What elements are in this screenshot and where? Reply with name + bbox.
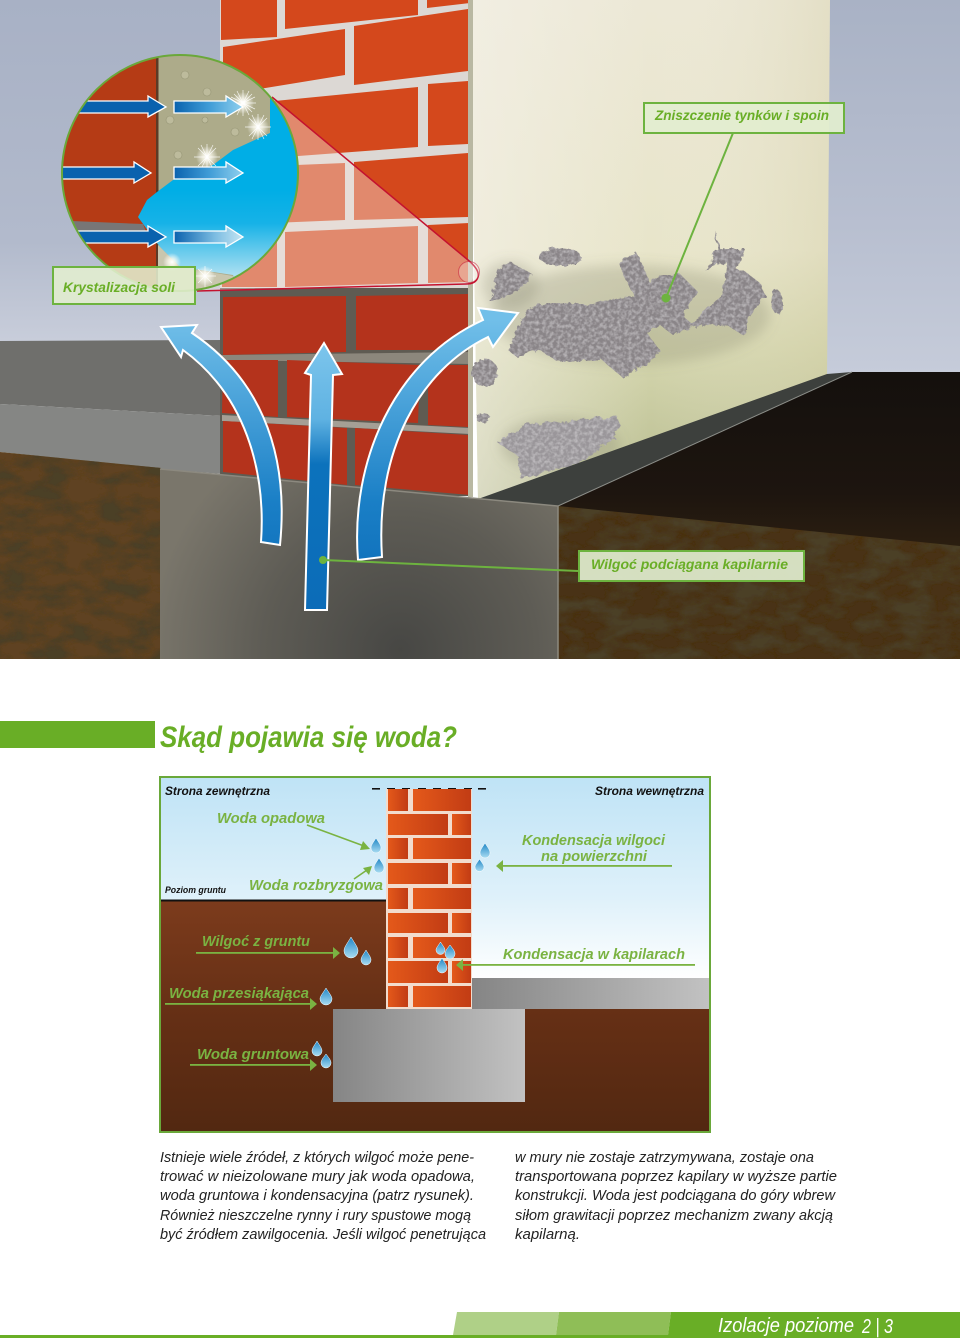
water source labels: Woda gruntowa — [197, 1046, 309, 1063]
callout: plaster damage: Zniszczenie tynków i spoin — [654, 107, 829, 123]
text block right: w mury nie zostaje zatrzymywana, zostaje ona — [515, 1150, 814, 1166]
text block right: transportowana poprzez kapilary w wyższe partie — [515, 1169, 837, 1185]
sky background — [161, 778, 709, 980]
top dashes — [372, 788, 486, 790]
floor slab — [472, 978, 709, 1009]
blue arrow left — [161, 325, 282, 545]
salt damage patches — [472, 230, 782, 479]
text block left — [160, 1150, 486, 1243]
water source labels: Wilgoć z gruntu — [202, 933, 310, 950]
water source labels — [169, 810, 685, 1063]
footer title: Izolacje poziome — [718, 1315, 854, 1337]
dark blue arrows — [55, 96, 166, 247]
text block right: konstrukcji. Woda jest podciągana do góry wbrew — [515, 1188, 837, 1204]
green arrows — [165, 825, 695, 1071]
fading blue arrows — [174, 96, 243, 247]
damp halo — [482, 261, 770, 473]
water source labels: Woda rozbryzgowa — [249, 877, 383, 894]
salt crystals — [163, 90, 271, 288]
leader line: capillary moisture — [319, 556, 578, 571]
callout: salt crystallisation — [53, 267, 195, 304]
footer band — [0, 1312, 960, 1338]
text block left: woda gruntowa i kondensacyjna (patrz rysunek). — [160, 1188, 474, 1204]
water source labels: Woda przesiąkająca — [169, 985, 309, 1002]
heading: Skąd pojawia się woda? — [160, 721, 457, 754]
brick wall — [386, 789, 472, 1009]
callout: capillary moisture: Wilgoć podciągana kapilarnie — [591, 556, 788, 572]
dark soil surface — [558, 372, 960, 546]
leader line: plaster damage — [662, 133, 733, 302]
soil left — [161, 901, 386, 1132]
photo illustration: damp wall cross-section — [0, 0, 960, 659]
blue arrow centre — [305, 343, 342, 610]
water drops — [312, 838, 490, 1068]
magnified circle: salt crystallisation — [55, 50, 305, 295]
plastered wall with damage — [468, 0, 830, 499]
text block right: siłom grawitacji poprzez mechanizm zwany akcją — [515, 1208, 833, 1224]
text block right — [515, 1150, 837, 1243]
metal flashing — [478, 372, 852, 506]
text block left: Istnieje wiele źródeł, z których wilgoć może pene- — [160, 1150, 474, 1166]
brick wall — [220, 0, 471, 496]
frame — [160, 777, 710, 1132]
background wall left — [0, 0, 225, 345]
soil right — [386, 1009, 709, 1132]
soil left — [0, 452, 161, 659]
ground level line — [161, 900, 386, 902]
water source labels: Kondensacja wilgoci — [522, 832, 666, 849]
callout: plaster damage — [644, 103, 844, 133]
blue arrow right — [357, 308, 518, 560]
text block left: trować w nieizolowane mury jak woda opadowa, — [160, 1169, 475, 1185]
soil right lower — [558, 505, 960, 659]
callout: salt crystallisation: Krystalizacja soli — [63, 279, 176, 295]
concrete foundation — [160, 469, 558, 659]
magnifier wedge — [160, 97, 480, 291]
background wall right — [820, 0, 960, 376]
side labels: Poziom gruntu — [165, 885, 226, 896]
water source labels: na powierzchni — [541, 848, 648, 865]
footing — [333, 1009, 525, 1102]
text block left: Również nieszczelne rynny i rury spustowe mogą — [160, 1208, 471, 1224]
side labels: Strona zewnętrzna — [165, 784, 270, 798]
text block right: kapilarną. — [515, 1227, 580, 1243]
side labels: Strona wewnętrzna — [595, 784, 704, 798]
diagram: water sources — [160, 777, 710, 1132]
grey paving slab — [0, 340, 222, 474]
side labels — [165, 784, 704, 896]
callout: capillary moisture — [579, 551, 804, 581]
text block left: być źródłem zawilgocenia. Jeśli wilgoć penetrująca — [160, 1227, 486, 1243]
water source labels: Woda opadowa — [217, 810, 325, 827]
heading bar — [0, 721, 155, 748]
water source labels: Kondensacja w kapilarach — [503, 946, 685, 963]
page numbers: 2 | 3 — [861, 1316, 893, 1338]
